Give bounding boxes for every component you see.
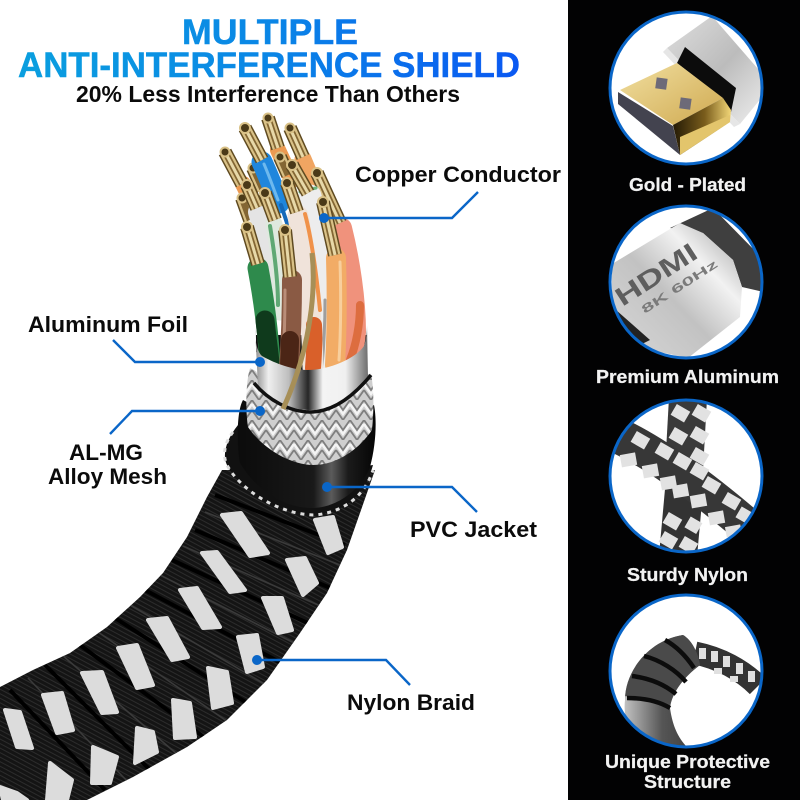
- blue wire: [240, 123, 290, 232]
- back wires: [220, 114, 316, 220]
- feature: sturdy nylon: [610, 398, 762, 585]
- brown wire: [280, 225, 292, 368]
- feature: unique protective structure: Unique Protective: [605, 751, 770, 772]
- callout: PVC jacket: PVC Jacket: [410, 517, 538, 542]
- icon: HDMI connector: [618, 16, 772, 155]
- callout: copper conductor: [319, 162, 561, 223]
- cable: nylon braid: [0, 460, 380, 800]
- icon: aluminium housing: HDMI: [609, 237, 703, 312]
- title: [18, 13, 520, 85]
- feature: unique protective structure: [605, 595, 770, 792]
- white-green wires: [242, 180, 281, 312]
- title: MULTIPLE: [182, 13, 358, 52]
- cable: alloy mesh: [246, 368, 373, 465]
- orange wire: [318, 197, 341, 365]
- dark tube interior: [256, 335, 367, 372]
- green wire: [242, 222, 270, 364]
- feature: premium aluminum: [596, 206, 779, 387]
- callout: nylon braid: Nylon Braid: [347, 690, 475, 715]
- feature: premium aluminum: Premium Aluminum: [596, 366, 779, 387]
- callout: copper conductor: Copper Conductor: [355, 162, 561, 187]
- feature: unique protective structure: Structure: [644, 771, 731, 792]
- callout: alloy mesh: [48, 406, 265, 489]
- feature: sturdy nylon: Sturdy Nylon: [627, 564, 748, 585]
- cable: dark ring under tube: [254, 375, 371, 412]
- cable: chrome tube: [255, 325, 368, 410]
- icon: aluminium housing: [609, 208, 764, 358]
- callout: aluminum foil: Aluminum Foil: [28, 312, 188, 337]
- icon: aluminium housing: 8K 60Hz: [639, 257, 720, 316]
- subtitle: 20% Less Interference Than Others: [76, 81, 460, 107]
- wires group: [220, 114, 367, 372]
- cable: serrated ring: [225, 425, 373, 515]
- feature: gold plated: [610, 12, 772, 195]
- feature: gold plated: Gold - Plated: [629, 174, 746, 195]
- drain wire: [283, 253, 313, 409]
- white weave patches: [0, 513, 342, 800]
- salmon wire: [312, 168, 360, 362]
- callout: alloy mesh: Alloy Mesh: [48, 464, 167, 489]
- icon: rubber strain relief: [625, 635, 758, 746]
- white-orange wire: [282, 178, 320, 368]
- callout: alloy mesh: AL-MG: [69, 440, 143, 465]
- panel: features: [568, 0, 800, 800]
- icon: crossed nylon straps: [621, 398, 752, 556]
- callout: aluminum foil: [28, 312, 265, 367]
- callout: PVC jacket: [322, 482, 538, 542]
- callout: nylon braid: [252, 655, 475, 715]
- white wire: [287, 160, 325, 366]
- title: ANTI-INTERFERENCE SHIELD: [18, 46, 520, 85]
- callouts: [28, 162, 561, 715]
- cable: PVC jacket: [238, 400, 376, 508]
